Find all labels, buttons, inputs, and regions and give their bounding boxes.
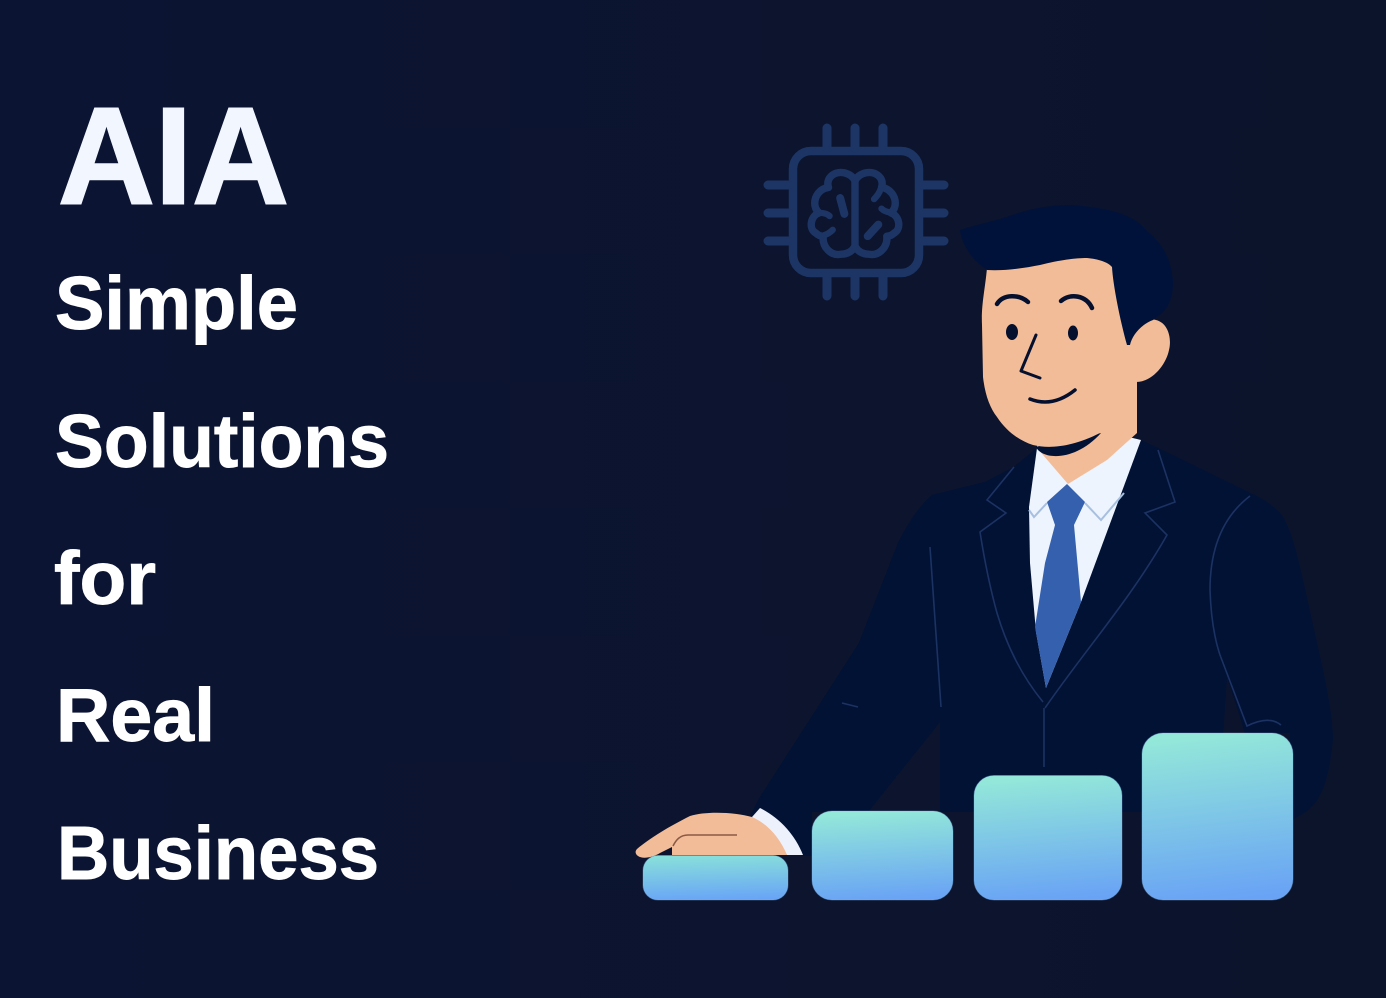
neck xyxy=(1037,380,1137,484)
bar 1 xyxy=(643,856,788,900)
bar 3 xyxy=(974,776,1122,900)
heading line: Solutions: Solutions xyxy=(55,399,389,483)
title: AIA: AIA xyxy=(58,80,289,234)
icon: AI chip with brain xyxy=(768,128,944,296)
facial features xyxy=(997,296,1092,402)
heading line: Real: Real xyxy=(56,673,215,757)
chin shadow xyxy=(1036,433,1101,456)
suit jacket xyxy=(748,440,1333,856)
heading line: Simple: Simple xyxy=(55,261,298,345)
hair xyxy=(960,205,1173,345)
businessman figure xyxy=(636,205,1333,858)
ear xyxy=(1128,320,1170,382)
hand xyxy=(636,813,787,858)
bar chart: four rising blocks xyxy=(643,733,1293,900)
bar 4 xyxy=(1142,733,1293,900)
title block xyxy=(54,80,389,895)
shirt collar lines xyxy=(1029,493,1124,520)
tie xyxy=(1035,484,1085,688)
shirt xyxy=(1029,430,1141,688)
face xyxy=(982,250,1136,447)
cuff xyxy=(752,808,803,855)
suit seam lines xyxy=(842,450,1281,767)
heading line: for: for xyxy=(54,536,156,620)
hand finger line xyxy=(673,835,737,846)
heading line: Business: Business xyxy=(57,811,379,895)
bar 2 xyxy=(812,811,953,900)
